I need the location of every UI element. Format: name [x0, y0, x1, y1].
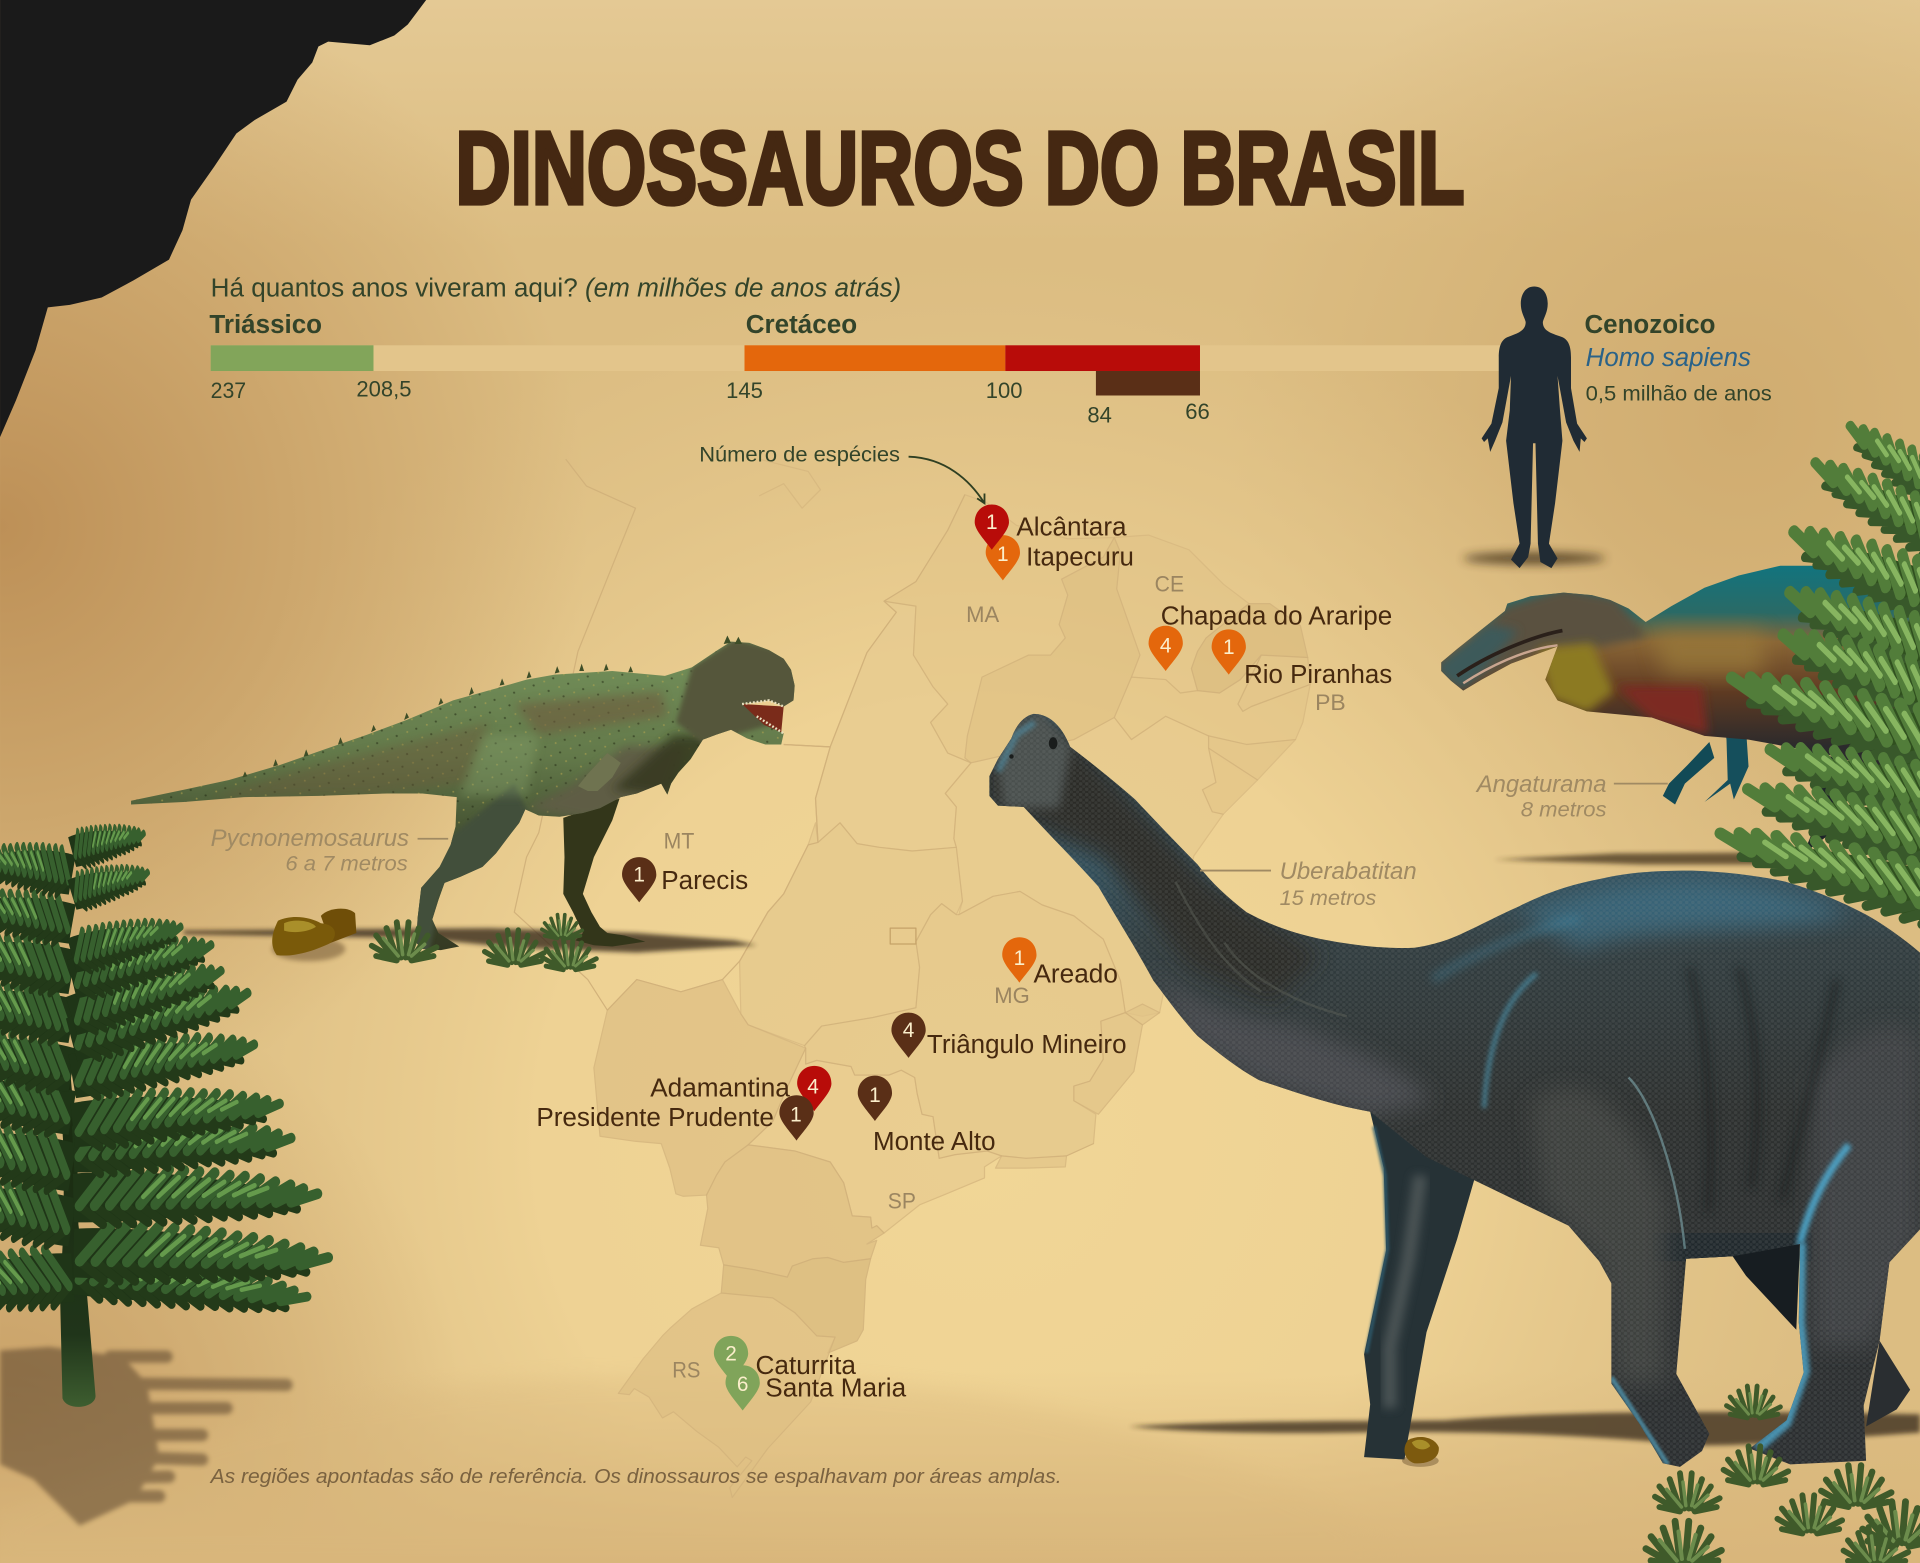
far legs	[1804, 744, 1849, 853]
bar: Cretáceo late	[1005, 345, 1200, 371]
pin: Triângulo Mineiro: 4	[903, 1019, 914, 1042]
grass tufts right	[1646, 1386, 1920, 1563]
timeline values	[211, 377, 1210, 427]
timeline values: 100	[986, 378, 1022, 403]
place names: Areado	[1033, 961, 1118, 989]
timeline values: 84	[1087, 402, 1112, 427]
pin: Caturrita and Santa Maria	[714, 1336, 760, 1411]
annotation: number of species	[699, 444, 984, 503]
pin: Monte Alto	[858, 1076, 892, 1121]
tree: right	[1712, 404, 1920, 954]
mouth	[742, 704, 784, 732]
body	[131, 642, 795, 950]
dinosaur: Uberabatitan	[980, 698, 1920, 1482]
colour patches	[1433, 588, 1763, 735]
far leg	[563, 798, 645, 946]
tree shadow	[0, 1347, 287, 1526]
ground shadow	[1129, 1412, 1920, 1445]
bar: Triássico	[211, 345, 373, 371]
pin: Areado: 1	[1014, 947, 1025, 970]
skin shading	[980, 698, 1920, 1482]
place names: Presidente Prudente	[536, 1104, 774, 1132]
label: Uberabatitan: Uberabatitan	[1280, 858, 1417, 885]
timeline values: 66	[1185, 399, 1210, 424]
pin: Monte Alto: 1	[869, 1084, 881, 1107]
place names	[536, 514, 1392, 1402]
label: Pycnonemosaurus	[211, 825, 448, 876]
place names: Chapada do Araripe	[1161, 602, 1392, 630]
timeline question: Há quantos anos viveram aqui? (em milhões de anos atrás)	[211, 274, 901, 302]
timeline values: 208,5	[356, 377, 411, 402]
label: Angaturama: Angaturama	[1475, 771, 1607, 798]
trunk	[58, 1053, 96, 1407]
eye and nostril	[1009, 737, 1057, 759]
title: DINOSSAUROS DO BRASIL	[456, 110, 1464, 225]
label: Angaturama	[1475, 771, 1668, 822]
body markings	[122, 637, 802, 955]
arm	[578, 753, 621, 791]
pin: Rio Piranhas: 1	[1223, 636, 1235, 659]
label: Uberabatitan: 15 metros	[1280, 887, 1376, 910]
label: Homo sapiens	[1584, 311, 1772, 405]
place names: Adamantina	[650, 1074, 791, 1102]
place names: Alcântara	[1016, 514, 1127, 542]
timeline	[209, 274, 1509, 427]
human figure	[1463, 287, 1605, 568]
coprolite right	[1402, 1437, 1439, 1467]
pin: Alcântara and Itapecuru: 1	[986, 511, 998, 534]
ground shadow	[184, 928, 757, 953]
far legs	[1364, 1112, 1475, 1460]
state labels	[664, 571, 1346, 1382]
pin: Adamantina and Presidente Prudente: 1	[790, 1104, 802, 1127]
pin: Chapada do Araripe: 4	[1160, 635, 1171, 658]
place names: Parecis	[661, 867, 748, 895]
label: Homo sapiens: Cenozoico	[1584, 311, 1715, 339]
state labels: PB	[1315, 690, 1346, 715]
state labels: SP	[888, 1189, 916, 1214]
pin: Caturrita and Santa Maria: 6	[737, 1373, 748, 1396]
label: Uberabatitan	[1200, 858, 1417, 910]
left branches	[0, 833, 78, 1317]
state labels: MT	[664, 829, 694, 854]
body	[989, 714, 1920, 1467]
body	[1441, 566, 1920, 780]
pin: Adamantina and Presidente Prudente	[779, 1066, 831, 1141]
ground shadow	[1494, 852, 1846, 864]
grass tufts left	[372, 915, 596, 970]
label: Angaturama: 8 metros	[1521, 799, 1607, 822]
back spikes	[242, 635, 742, 778]
pin: Rio Piranhas	[1212, 629, 1246, 675]
state labels: CE	[1155, 571, 1184, 596]
pin: Parecis	[622, 857, 656, 902]
place names: Monte Alto	[873, 1128, 996, 1156]
timeline track	[211, 345, 1509, 371]
place names: Itapecuru	[1026, 544, 1134, 572]
place names: Triângulo Mineiro	[927, 1031, 1127, 1059]
place names: Rio Piranhas	[1244, 661, 1392, 689]
pin: Caturrita and Santa Maria: 2	[725, 1342, 737, 1365]
state labels: MG	[994, 983, 1030, 1008]
label: Pycnonemosaurus: Pycnonemosaurus	[211, 825, 409, 852]
pin: Areado	[1002, 937, 1037, 983]
label: Homo sapiens: Homo sapiens	[1586, 344, 1751, 372]
dark corner shape	[0, 0, 426, 437]
pin: Adamantina and Presidente Prudente: 4	[807, 1075, 819, 1098]
label: Pycnonemosaurus: 6 a 7 metros	[285, 853, 408, 876]
period label: Cretáceo: Cretáceo	[746, 311, 857, 339]
bar: Cretáceo early	[744, 345, 1005, 371]
right branches	[64, 815, 329, 1321]
pin: Parecis: 1	[633, 864, 645, 887]
timeline values: 237	[211, 378, 246, 403]
map of Brazil	[514, 459, 1310, 1497]
pin: Alcântara and Itapecuru: 1	[997, 543, 1009, 566]
dinosaur: Pycnonemosaurus	[122, 635, 802, 955]
dinosaur: Angaturama	[1433, 566, 1920, 864]
state labels: RS	[672, 1357, 700, 1382]
pin: Chapada do Araripe	[1149, 626, 1183, 671]
footnote: As regiões apontadas são de referência. Os dinossauros se espalhavam por áreas amplas.	[210, 1466, 1062, 1488]
period label: Triássico: Triássico	[209, 311, 322, 339]
state labels: MA	[966, 602, 999, 627]
timeline values: 145	[726, 378, 763, 403]
annotation: number of species: Número de espécies	[699, 444, 900, 467]
label: Homo sapiens: 0,5 milhão de anos	[1586, 382, 1772, 405]
place names: Santa Maria	[765, 1374, 907, 1402]
pin: Triângulo Mineiro	[891, 1013, 926, 1058]
bar: 84 to 66	[1096, 371, 1200, 395]
coprolite left	[272, 909, 356, 961]
pin: Alcântara and Itapecuru	[975, 504, 1020, 580]
place names: Caturrita	[756, 1352, 857, 1380]
tree: left	[0, 815, 329, 1407]
